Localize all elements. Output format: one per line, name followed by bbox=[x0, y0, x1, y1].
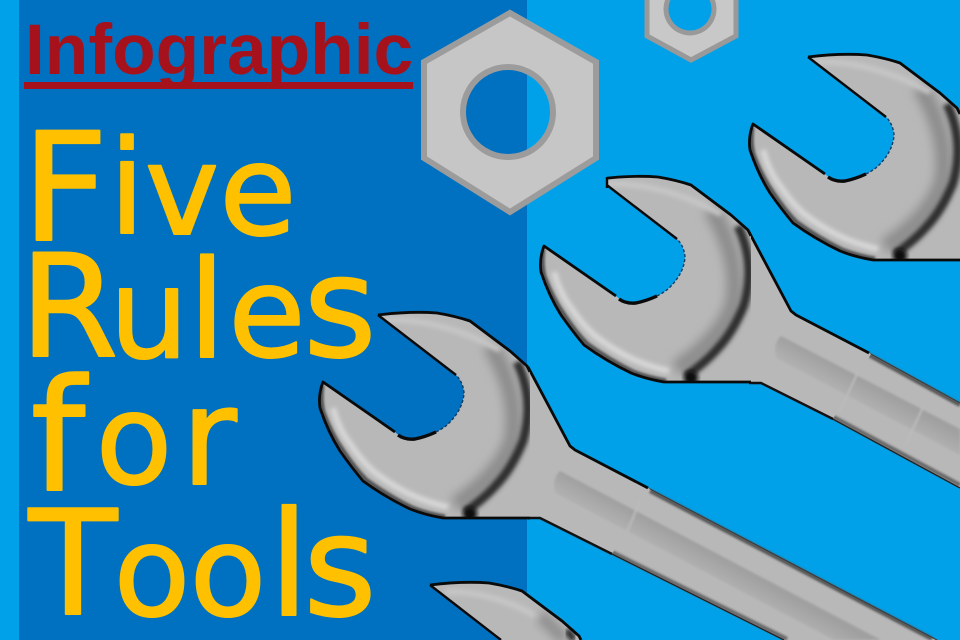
title line: Rules: l bbox=[188, 232, 226, 389]
small hex nut, cut off at the top edge bbox=[647, 0, 736, 60]
title line: Rules: s bbox=[304, 227, 376, 390]
title line: Five: F bbox=[22, 102, 108, 276]
title line: Five: v bbox=[145, 119, 219, 264]
label: Infographic underlined heading: Infographic bbox=[25, 10, 413, 90]
title line: Five: e bbox=[220, 119, 296, 264]
wrench: large centre bbox=[319, 312, 937, 640]
title line: for: f bbox=[31, 346, 89, 527]
title line: for: o bbox=[96, 368, 172, 513]
wrench: top right bbox=[749, 54, 960, 263]
title line: for: r bbox=[181, 359, 237, 516]
title line: Five: i bbox=[109, 112, 145, 264]
wrench: middle right bbox=[540, 176, 960, 488]
panel: dark-blue title column bbox=[19, 0, 527, 640]
title line: Rules: e bbox=[229, 241, 305, 386]
title line: Rules: u bbox=[109, 242, 189, 387]
title line: Rules: R bbox=[20, 225, 118, 390]
wrench: bottom, mostly cut off bbox=[430, 582, 581, 640]
large hex nut bbox=[424, 13, 596, 212]
